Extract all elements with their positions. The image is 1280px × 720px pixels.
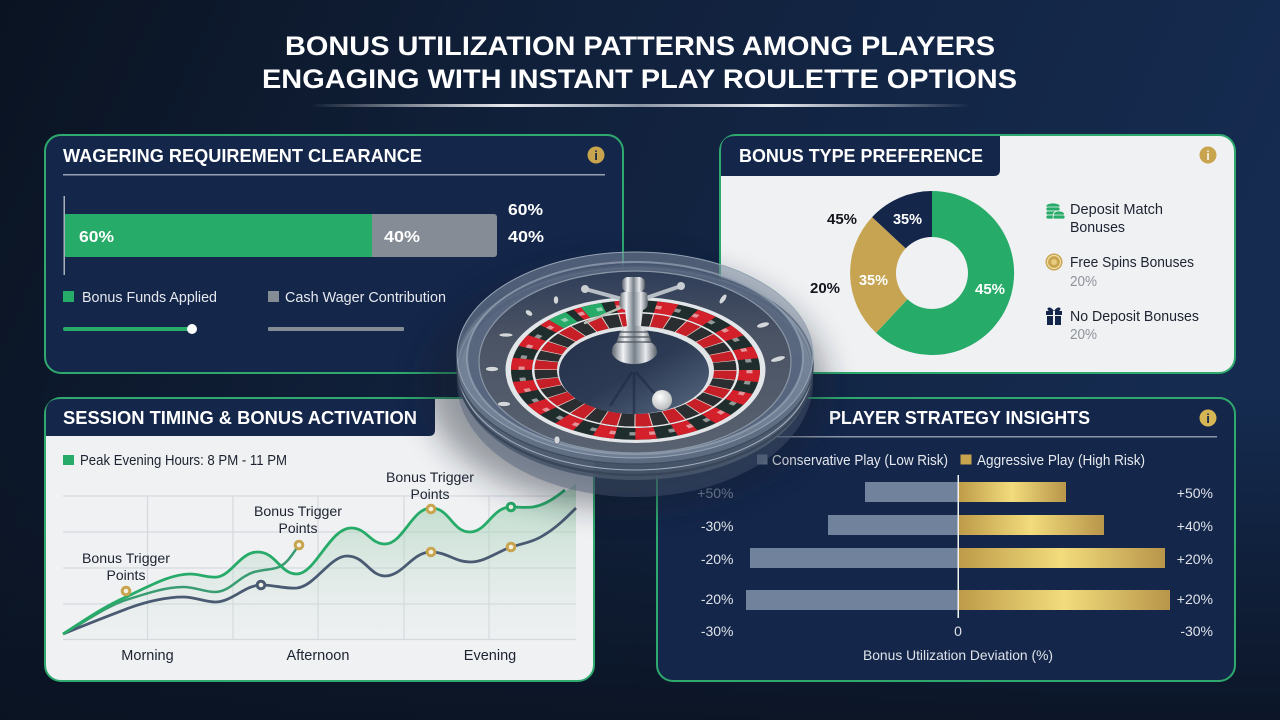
legend: deposit match: Bonuses: [1070, 220, 1125, 236]
legend: cash wager: [268, 290, 446, 331]
legend: risk: Aggressive Play (High Risk): [977, 453, 1145, 469]
legend: bonus funds: Bonus Funds Applied: [82, 290, 217, 306]
icon: coins: [1046, 203, 1065, 219]
legend: cash wager: Cash Wager Contribution: [285, 290, 446, 306]
legend: no deposit: No Deposit Bonuses: [1070, 309, 1199, 325]
panel: session timing: [45, 398, 594, 681]
wheel lower rim: [457, 266, 813, 480]
stacked bar: 40%: [384, 229, 420, 246]
glass base: [457, 267, 813, 497]
donut chart: 20%: [810, 280, 840, 297]
wheel bowl: [479, 271, 791, 453]
icon: info: i: [1206, 148, 1210, 163]
wheel cone: [559, 330, 709, 414]
ball: [652, 390, 672, 410]
icon: info: [1200, 410, 1216, 426]
panel heading: session timing: SESSION TIMING & BONUS ACTIVATION: [63, 407, 417, 428]
x axis labels: [121, 648, 516, 664]
bonus trigger labels: Bonus Trigger: [254, 503, 342, 519]
roulette wheel: [425, 252, 825, 507]
icon: info: i: [1206, 411, 1210, 426]
legend: risk: Conservative Play (Low Risk): [772, 453, 948, 469]
legend: no deposit: 20%: [1070, 327, 1097, 343]
bonus trigger labels: Bonus Trigger: [386, 469, 474, 485]
stacked bar: 40%: [508, 229, 544, 246]
x axis labels: Afternoon: [287, 648, 349, 664]
left axis labels: -20%: [701, 551, 734, 567]
panel: player strategy insights: [657, 398, 1235, 681]
right axis labels: +20%: [1177, 551, 1213, 567]
right axis labels: +40%: [1177, 518, 1213, 534]
x axis labels: Morning: [121, 648, 174, 664]
bonus trigger labels: Points: [279, 520, 317, 536]
right axis labels: +20%: [1177, 591, 1213, 607]
axis title: [863, 623, 1053, 663]
legend: deposit match: Deposit Match: [1070, 202, 1163, 218]
right axis labels: +50%: [1177, 485, 1213, 501]
panel heading: wagering: WAGERING REQUIREMENT CLEARANCE: [63, 145, 422, 166]
panel heading: strategy: PLAYER STRATEGY INSIGHTS: [829, 407, 1090, 428]
bonus trigger labels: Bonus Trigger: [82, 550, 170, 566]
diamond markers: [486, 293, 786, 444]
icon: gift: [1046, 308, 1062, 325]
right axis labels: [1177, 485, 1213, 639]
donut chart: 35%: [859, 272, 888, 289]
diverging bar chart: [746, 475, 1170, 618]
legend: no deposit: [1046, 308, 1199, 343]
panel: wagering requirement clearance: [45, 135, 623, 373]
donut chart: 45%: [827, 211, 857, 228]
legend: free spins: [1046, 254, 1194, 290]
left axis labels: +50%: [697, 485, 734, 501]
legend: peak hours: Peak Evening Hours: 8 PM - 11 PM: [80, 453, 287, 469]
panel: bonus type preference: [720, 135, 1235, 373]
right axis labels: -30%: [1180, 623, 1213, 639]
legend: free spins: 20%: [1070, 274, 1097, 290]
left axis labels: -30%: [701, 518, 734, 534]
bonus trigger labels: [82, 469, 474, 583]
title: BONUS UTILIZATION PATTERNS AMONG PLAYERS: [285, 31, 995, 61]
bonus trigger labels: Points: [107, 567, 145, 583]
axis title: 0: [954, 623, 962, 639]
icon: spin token: [1046, 254, 1062, 270]
legend: deposit match: [1046, 202, 1163, 236]
bonus trigger labels: Points: [411, 486, 449, 502]
icon: info: i: [594, 148, 598, 163]
legend: bonus funds: [63, 290, 217, 334]
stacked bar: 60%: [79, 229, 114, 246]
panel heading: bonus type: BONUS TYPE PREFERENCE: [739, 145, 983, 166]
spindle: [581, 277, 685, 364]
title: ENGAGING WITH INSTANT PLAY ROULETTE OPTIONS: [262, 64, 1017, 94]
wheel pockets: [474, 280, 797, 460]
line chart: [63, 484, 576, 640]
panel heading: bonus type: [721, 136, 1000, 178]
icon: info: [588, 146, 604, 164]
title: [262, 31, 1017, 94]
left axis labels: -30%: [701, 623, 734, 639]
wheel top rim: [457, 252, 813, 458]
donut chart: 45%: [975, 281, 1005, 298]
left axis labels: [697, 485, 734, 639]
donut chart: [810, 191, 1014, 355]
bonus trigger markers: [122, 503, 515, 595]
x axis labels: Evening: [464, 648, 516, 664]
stacked bar: 60%: [508, 202, 543, 219]
left axis labels: -20%: [701, 591, 734, 607]
stacked bar: [64, 196, 544, 275]
axis title: Bonus Utilization Deviation (%): [863, 647, 1053, 663]
icon: info: [1200, 146, 1216, 164]
legend: risk: [757, 453, 1145, 469]
donut chart: 35%: [893, 211, 922, 228]
panel heading: session timing: [46, 399, 435, 437]
legend: free spins: Free Spins Bonuses: [1070, 255, 1194, 271]
